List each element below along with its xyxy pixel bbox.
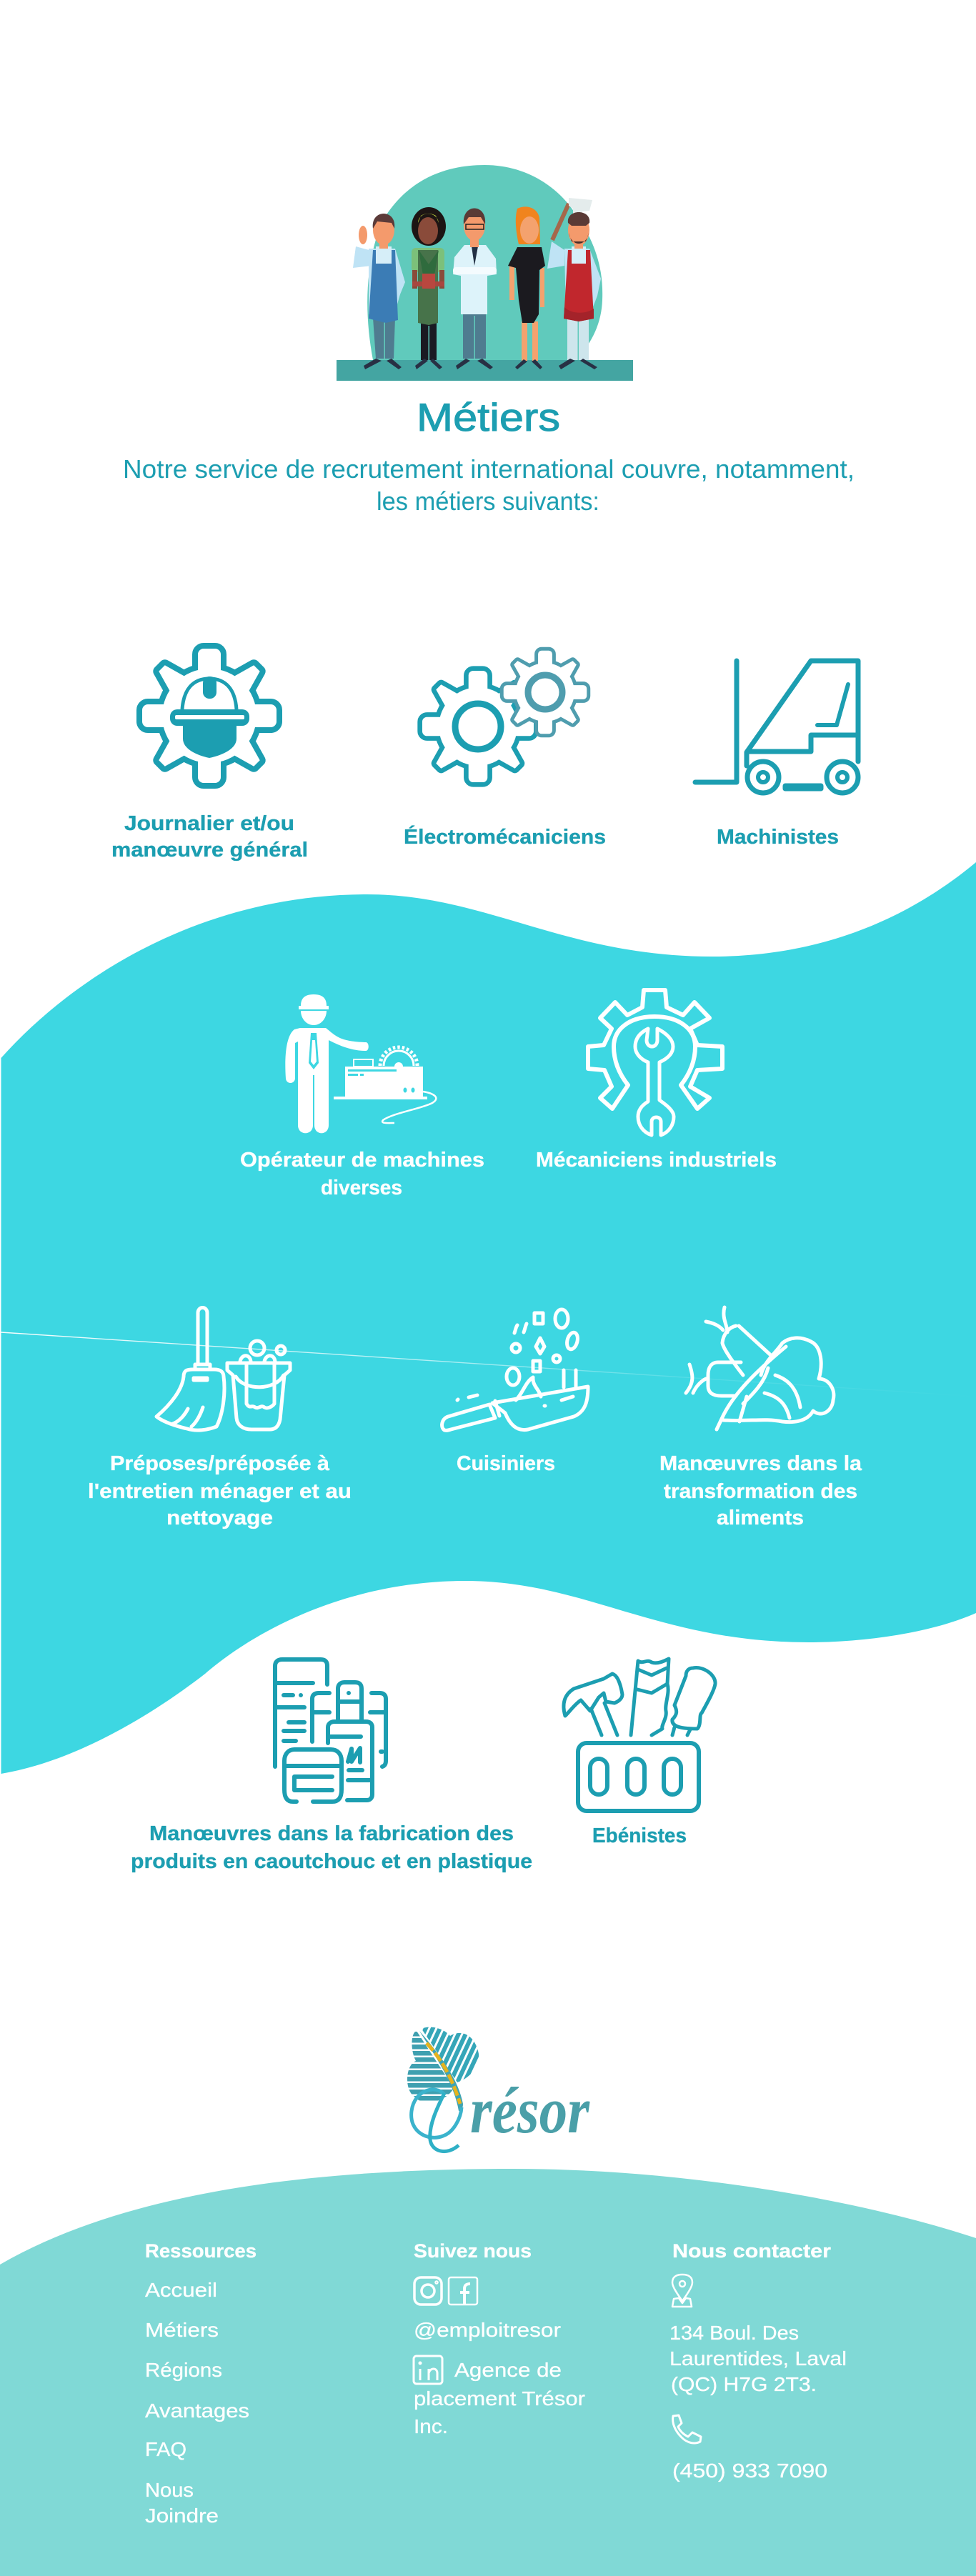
links: Accueil [145, 2279, 217, 2301]
linkedin name: Inc. [414, 2415, 448, 2437]
icon: forklift [695, 661, 858, 793]
links: FAQ [145, 2438, 186, 2460]
seam line across the cyan panel [1, 1332, 976, 1397]
label: diverses [321, 1177, 402, 1199]
links: Joindre [145, 2505, 219, 2527]
icon: operator and saw machine [285, 994, 436, 1133]
footer column: ressources [145, 2240, 257, 2527]
label: Opérateur de machines [240, 1149, 484, 1172]
footer column: suivez nous [414, 2240, 585, 2437]
label: Préposes/préposée à [110, 1452, 330, 1475]
title: Métiers [417, 395, 560, 439]
linkedin name: Agence de [454, 2359, 562, 2381]
intro text [123, 454, 855, 516]
phone number: (450) 933 7090 [672, 2460, 827, 2482]
address [669, 2322, 847, 2395]
icon: facebook [449, 2277, 477, 2305]
heading: Ressources [145, 2240, 257, 2262]
linkedin name: placement Trésor [414, 2387, 585, 2410]
label: nettoyage [166, 1507, 273, 1529]
cyan wave panel [1, 862, 976, 1774]
intro text: Notre service de recrutement international couvre, notamment, [123, 454, 855, 484]
icon: tools in holder [564, 1659, 715, 1811]
label: l'entretien ménager et au [88, 1480, 352, 1503]
label: Ebénistes [592, 1824, 687, 1847]
handle: @emploitresor [414, 2319, 561, 2341]
linkedin name [414, 2359, 585, 2437]
icon: frying pan with food [442, 1309, 588, 1430]
label [111, 812, 308, 862]
icon: gear with helmet [142, 649, 277, 783]
label [659, 1452, 862, 1529]
item: électromécaniciens [404, 651, 606, 849]
label: produits en caoutchouc et en plastique [131, 1850, 532, 1873]
links [145, 2279, 249, 2527]
item: caoutchouc et plastique [131, 1659, 532, 1873]
logo leaf stripes [407, 2027, 479, 2152]
label [131, 1822, 532, 1873]
icon: gear and wrench [588, 990, 722, 1135]
label: manœuvre général [111, 839, 308, 862]
address: (QC) H7G 2T3. [671, 2373, 817, 2395]
label: Manœuvres dans la [659, 1452, 862, 1475]
item: préposés à l'entretien [88, 1307, 352, 1529]
icon: two gears [422, 651, 587, 782]
label: Manœuvres dans la fabrication des [149, 1822, 514, 1845]
links: Avantages [145, 2400, 249, 2422]
intro text: les métiers suivants: [377, 486, 599, 516]
logo: Trésor [407, 2027, 590, 2152]
teal blob backdrop [367, 165, 602, 360]
links: Métiers [145, 2319, 219, 2341]
item: machinistes [695, 661, 858, 849]
label: aliments [717, 1507, 804, 1529]
icon: instagram [414, 2277, 442, 2305]
worker: blue apron [353, 214, 405, 369]
icon: linkedin [414, 2356, 442, 2384]
heading: Nous contacter [672, 2240, 832, 2262]
footer column: nous contacter [669, 2240, 847, 2482]
icon: broom and bucket [156, 1307, 290, 1430]
logo wordmark: résor [470, 2074, 590, 2147]
icon: map pin [672, 2275, 692, 2307]
label: transformation des [664, 1480, 857, 1503]
label [240, 1149, 484, 1199]
links: Nous [145, 2479, 194, 2501]
address: 134 Boul. Des [669, 2322, 799, 2344]
item: ébénistes [564, 1659, 715, 1847]
illustration: five workers [337, 165, 633, 381]
icon: phone [673, 2415, 701, 2443]
item: journalier [111, 649, 308, 862]
label [88, 1452, 352, 1529]
label: Électromécaniciens [404, 824, 606, 849]
item: mécaniciens industriels [536, 990, 777, 1172]
item: opérateur de machines [240, 994, 484, 1199]
platform [337, 360, 633, 381]
heading: Suivez nous [414, 2240, 532, 2262]
worker: chef in red apron with rolling pin [547, 198, 601, 369]
worker: green apron with plant [412, 207, 446, 369]
item: manœuvres transformation des aliments [659, 1307, 862, 1529]
worker: woman in black dress [508, 206, 545, 369]
worker: doctor [453, 209, 497, 369]
icon: vegetables [686, 1307, 834, 1429]
label: Journalier et/ou [124, 812, 294, 835]
links: Régions [145, 2359, 222, 2381]
item: cuisiniers [442, 1309, 588, 1475]
address: Laurentides, Laval [669, 2347, 847, 2370]
label: Machinistes [717, 826, 839, 849]
label: Mécaniciens industriels [536, 1149, 777, 1172]
icon: plastic bottles and containers [275, 1659, 386, 1802]
label: Cuisiniers [457, 1452, 555, 1475]
footer background [0, 2169, 976, 2576]
